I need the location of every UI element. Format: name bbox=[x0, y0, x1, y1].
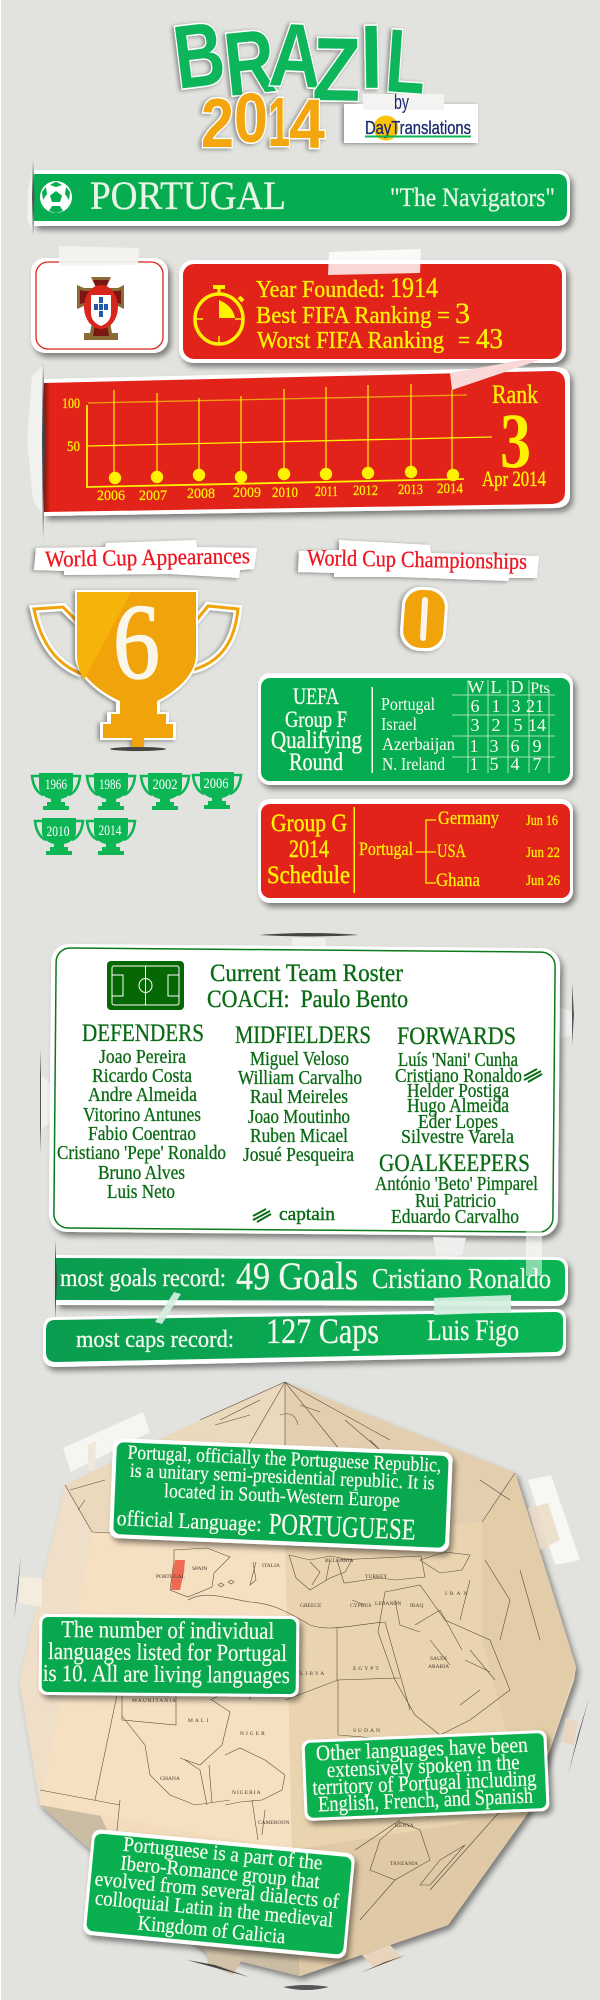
chart axis labels: 2012 bbox=[353, 483, 378, 499]
trophy 2006: 2006 bbox=[204, 776, 229, 792]
trophy 1986 bbox=[87, 773, 135, 810]
map labels: SPAIN bbox=[192, 1566, 207, 1572]
standings: 6 bbox=[510, 736, 520, 756]
icon: stopwatch bbox=[195, 287, 243, 344]
schedule heading: 2014 bbox=[289, 836, 329, 863]
logo card: Day Translations: DayTranslations bbox=[365, 118, 471, 138]
map labels: SUDAN bbox=[353, 1728, 382, 1734]
callout: official language: Portugal, officially the Portuguese Republic, bbox=[127, 1442, 442, 1477]
chart axis labels: 2013 bbox=[398, 482, 423, 498]
chart axis labels: 2009 bbox=[233, 485, 261, 501]
map labels: GREECE bbox=[300, 1603, 322, 1609]
map labels: MALI bbox=[188, 1718, 210, 1724]
midfielders bbox=[235, 1022, 371, 1166]
panel: FIFA stats: 1914 bbox=[390, 272, 438, 304]
fixtures: Jun 26 bbox=[526, 873, 560, 889]
goalkeepers bbox=[375, 1150, 538, 1228]
title: Brazil: B bbox=[168, 4, 230, 109]
defenders bbox=[57, 1020, 226, 1203]
standings bbox=[381, 677, 555, 774]
standings: N. Ireland bbox=[382, 754, 445, 774]
callout: official language: official Language: bbox=[116, 1505, 262, 1536]
fixtures: Germany bbox=[438, 808, 499, 829]
qualifying heading: Qualifying bbox=[271, 727, 362, 754]
map labels: MAURITANIA bbox=[132, 1698, 177, 1704]
title: Brazil: I bbox=[360, 8, 383, 108]
qualifying heading: Group F bbox=[285, 707, 347, 732]
standings: Pts bbox=[530, 680, 550, 697]
chart axis labels: 2010 bbox=[272, 485, 298, 501]
defenders: DEFENDERS bbox=[82, 1020, 204, 1047]
header banner: Portugal bbox=[27, 160, 570, 236]
callout: other languages bbox=[301, 1730, 550, 1821]
roster heading: COACH: Paulo Bento bbox=[207, 986, 408, 1013]
icon: football bbox=[40, 181, 72, 213]
forwards bbox=[395, 1023, 542, 1148]
map labels: CAMEROON bbox=[258, 1820, 290, 1826]
schedule heading: Group G bbox=[271, 810, 347, 837]
map labels: ARABIA bbox=[428, 1664, 449, 1670]
chart axis labels: 50 bbox=[67, 439, 80, 455]
callout: official language bbox=[109, 1438, 453, 1552]
globe: paper map polyhedron bbox=[19, 1382, 576, 1976]
forwards: Cristiano Ronaldo bbox=[395, 1065, 522, 1087]
standings: 3 bbox=[512, 696, 520, 716]
heading: World Cup Championships: World Cup Championships bbox=[307, 545, 527, 574]
map labels: NIGERIA bbox=[232, 1790, 262, 1796]
forwards: Hugo Almeida bbox=[407, 1095, 509, 1117]
line chart bbox=[87, 384, 492, 487]
map labels: IRAQ bbox=[410, 1603, 423, 1609]
map labels: ITALIA bbox=[262, 1563, 280, 1569]
map labels bbox=[132, 1558, 470, 1867]
standings: 9 bbox=[532, 736, 542, 756]
trophy 2010: 2010 bbox=[46, 824, 70, 840]
forwards: FORWARDS bbox=[397, 1023, 516, 1050]
callout: individual languages: languages listed for Portugal bbox=[48, 1639, 287, 1667]
captain legend: captain bbox=[279, 1204, 336, 1225]
title: Brazil: A bbox=[267, 5, 324, 108]
icon: gold trophy with 6 appearances: 6 bbox=[113, 583, 160, 702]
schedule heading: Schedule bbox=[267, 862, 350, 889]
defenders: Joao Pereira bbox=[99, 1046, 186, 1068]
title: Brazil: Z bbox=[312, 20, 361, 121]
trophy 1966 bbox=[32, 773, 80, 810]
qualifying heading bbox=[271, 684, 362, 776]
forwards: Eder Lopes bbox=[418, 1111, 498, 1133]
current rank: Rank bbox=[492, 380, 538, 409]
callout: Ibero-Romance origin: Portuguese is a part of the bbox=[122, 1832, 324, 1875]
current rank: 3 bbox=[500, 397, 531, 484]
standings: 1 bbox=[470, 754, 478, 774]
panel: FIFA stats: 43 bbox=[476, 324, 503, 355]
map labels: CYPRUS bbox=[350, 1603, 371, 1609]
callout: other languages: Other languages have been bbox=[315, 1732, 528, 1766]
trophy 2006 bbox=[193, 772, 241, 809]
small trophies: appearance years bbox=[32, 772, 241, 855]
standings: L bbox=[490, 677, 502, 697]
title: 2014: 0 bbox=[234, 79, 268, 157]
globe mounting tapes bbox=[14, 1412, 589, 1990]
map labels: LIBYA bbox=[300, 1671, 326, 1677]
standings: 5 bbox=[490, 754, 498, 774]
decorative tape join bbox=[433, 1237, 466, 1262]
title: 2014: 4 bbox=[289, 85, 325, 163]
current rank: Apr 2014 bbox=[482, 466, 546, 491]
goalkeepers: Rui Patricio bbox=[415, 1190, 496, 1212]
icon: gold trophy with 6 appearances bbox=[34, 583, 238, 751]
map labels: EGYPT bbox=[353, 1666, 381, 1672]
goalkeepers: António 'Beto' Pimparel bbox=[375, 1173, 538, 1195]
title: 2014: 2 bbox=[201, 84, 234, 162]
trophy 2014 bbox=[87, 818, 135, 855]
callout: individual languages: is 10. All are living languages bbox=[43, 1661, 290, 1689]
record bar: most goals: 49 Goals bbox=[236, 1255, 358, 1298]
record bar: most caps: most caps record: bbox=[76, 1327, 234, 1353]
fixtures: Jun 16 bbox=[526, 813, 558, 829]
title: 2014: 1 bbox=[268, 83, 290, 161]
chart axis labels: 2006 bbox=[97, 488, 125, 504]
defenders: Ricardo Costa bbox=[92, 1065, 192, 1087]
defenders: Fabio Coentrao bbox=[88, 1123, 196, 1145]
fixtures: Portugal bbox=[359, 839, 413, 860]
map: Portugal highlighted bbox=[171, 1560, 185, 1590]
callout: Ibero-Romance origin: Ibero-Romance group that bbox=[119, 1851, 321, 1893]
standings: 3 bbox=[490, 736, 498, 756]
standings: Israel bbox=[381, 714, 417, 734]
midfielders: Joao Moutinho bbox=[248, 1106, 350, 1128]
map labels: PORTUGAL bbox=[156, 1574, 186, 1580]
map labels: LEBANON bbox=[375, 1601, 401, 1607]
panel: FIFA rank chart bbox=[27, 360, 570, 540]
midfielders: Ruben Micael bbox=[250, 1125, 348, 1147]
panel: FIFA stats: 3 bbox=[455, 297, 470, 330]
callout: official language: PORTUGUESE bbox=[268, 1508, 416, 1547]
captain legend bbox=[253, 1204, 336, 1225]
panel: FIFA stats: Year Founded: bbox=[256, 277, 385, 303]
panel: FIFA stats: Worst FIFA Ranking bbox=[257, 328, 444, 354]
map labels: KENYA bbox=[395, 1823, 414, 1829]
callout: official language: is a unitary semi-presidential republic. It is bbox=[129, 1460, 435, 1494]
goalkeepers: GOALKEEPERS bbox=[379, 1150, 530, 1177]
trophy 1966: 1966 bbox=[45, 777, 67, 793]
callout: official language: located in South-Western Europe bbox=[164, 1480, 400, 1512]
defenders: Andre Almeida bbox=[88, 1084, 197, 1106]
forwards: Silvestre Varela bbox=[401, 1126, 514, 1148]
panel: FIFA stats: Best FIFA Ranking = bbox=[256, 303, 450, 329]
standings: Portugal bbox=[381, 694, 435, 714]
header banner: Portugal: "The Navigators" bbox=[390, 183, 555, 212]
heading: World Cup Championships bbox=[298, 540, 539, 581]
midfielders: William Carvalho bbox=[238, 1067, 362, 1089]
forwards: Helder Postiga bbox=[407, 1080, 509, 1102]
standings: 5 bbox=[514, 715, 522, 735]
standings: Azerbaijan bbox=[382, 734, 455, 754]
logo card: Day Translations: by bbox=[394, 92, 409, 114]
map labels: BULGARIA bbox=[325, 1558, 353, 1564]
standings: 6 bbox=[470, 696, 480, 716]
record bar: most caps: Luis Figo bbox=[427, 1314, 519, 1347]
record bar: most caps: 127 Caps bbox=[266, 1311, 379, 1351]
callout: other languages: territory of Portugal including bbox=[312, 1765, 537, 1800]
standings: 2 bbox=[492, 715, 500, 735]
title: Brazil: L bbox=[383, 11, 429, 114]
header banner: Portugal: PORTUGAL bbox=[90, 173, 286, 218]
icon: football pitch bbox=[107, 961, 184, 1010]
chart axis labels: 2007 bbox=[139, 488, 167, 504]
map labels: GHANA bbox=[160, 1776, 180, 1782]
chart axis labels: 2014 bbox=[437, 481, 463, 497]
map labels: SAUDI bbox=[430, 1656, 447, 1662]
trophy 1986: 1986 bbox=[99, 777, 121, 793]
title: 2014 bbox=[201, 79, 325, 163]
current rank bbox=[482, 380, 546, 491]
defenders: Bruno Alves bbox=[98, 1162, 185, 1184]
goalkeepers: Eduardo Carvalho bbox=[391, 1206, 519, 1228]
trophy 2014: 2014 bbox=[98, 823, 122, 839]
map labels: IRAN bbox=[445, 1591, 470, 1597]
trophy 2002 bbox=[141, 773, 189, 810]
roster heading: Current Team Roster bbox=[210, 960, 404, 987]
midfielders: Raul Meireles bbox=[250, 1086, 348, 1108]
fixtures: USA bbox=[437, 841, 466, 862]
fixtures bbox=[359, 808, 560, 891]
callout: other languages: English, French, and Spanish bbox=[318, 1783, 533, 1816]
standings: 4 bbox=[510, 754, 520, 774]
panel: team roster bbox=[40, 933, 574, 1236]
defenders: Vitorino Antunes bbox=[83, 1104, 201, 1126]
callout: other languages: extensively spoken in the bbox=[326, 1749, 520, 1782]
defenders: Cristiano 'Pepe' Ronaldo bbox=[57, 1142, 226, 1164]
defenders: Luis Neto bbox=[107, 1181, 175, 1203]
midfielders: Josué Pesqueira bbox=[243, 1144, 354, 1166]
record bar: most goals: Cristiano Ronaldo bbox=[372, 1263, 551, 1295]
chart axis labels: 2011 bbox=[315, 484, 338, 500]
standings: D bbox=[510, 677, 524, 697]
callout: individual languages bbox=[39, 1614, 299, 1697]
standings: W bbox=[468, 677, 484, 697]
standings: 21 bbox=[526, 696, 544, 716]
chart axis labels: 2008 bbox=[187, 486, 215, 502]
roster heading bbox=[207, 960, 408, 1013]
callout: Ibero-Romance origin bbox=[83, 1829, 355, 1959]
standings: 3 bbox=[470, 715, 480, 735]
tape strips on records bbox=[155, 1210, 542, 1324]
icon: Portuguese federation crest bbox=[77, 277, 124, 340]
record bar: most caps bbox=[43, 1309, 566, 1367]
chart axis labels: 100 bbox=[62, 396, 80, 412]
schedule heading bbox=[267, 810, 350, 889]
midfielders: Miguel Veloso bbox=[250, 1048, 349, 1070]
standings: 14 bbox=[528, 715, 546, 735]
panel: UEFA qualifying table bbox=[258, 673, 573, 785]
heading: World Cup Appearances: World Cup Appearances bbox=[45, 543, 250, 572]
panel: Group G schedule bbox=[258, 799, 573, 903]
record bar: most goals bbox=[55, 1240, 568, 1320]
map labels: TURKEY bbox=[365, 1574, 387, 1580]
title: Brazil: R bbox=[220, 11, 280, 116]
callout: individual languages: The number of individual bbox=[61, 1617, 275, 1645]
callout: Ibero-Romance origin: colloquial Latin in the medieval bbox=[94, 1885, 334, 1932]
forwards: Luís 'Nani' Cunha bbox=[398, 1049, 518, 1071]
title: Brazil bbox=[168, 4, 429, 121]
map labels: NIGER bbox=[240, 1731, 267, 1737]
trophy 2002: 2002 bbox=[152, 777, 178, 793]
midfielders: MIDFIELDERS bbox=[235, 1022, 371, 1049]
heading: World Cup Appearances bbox=[34, 540, 257, 578]
qualifying heading: Round bbox=[289, 749, 343, 776]
trophy 2010 bbox=[35, 818, 83, 855]
standings: 1 bbox=[492, 696, 500, 716]
qualifying heading: UEFA bbox=[293, 684, 339, 709]
map borders bbox=[40, 1382, 540, 1920]
record bar: most goals: most goals record: bbox=[60, 1265, 226, 1292]
callout: Ibero-Romance origin: Kingdom of Galicia bbox=[137, 1911, 287, 1948]
icon: zero championships bbox=[399, 585, 449, 653]
standings: 7 bbox=[532, 754, 542, 774]
fixtures: Ghana bbox=[436, 870, 480, 891]
map labels: TANZANIA bbox=[390, 1861, 418, 1867]
standings: 1 bbox=[470, 736, 478, 756]
logo card: Day Translations bbox=[344, 92, 478, 143]
panel: crest bbox=[31, 246, 168, 353]
callout: Ibero-Romance origin: evolved from several dialects of bbox=[94, 1866, 340, 1913]
fixtures: Jun 22 bbox=[526, 845, 560, 861]
panel: FIFA stats: = bbox=[458, 328, 470, 354]
chart axis labels bbox=[62, 396, 463, 504]
panel: FIFA stats bbox=[179, 249, 566, 363]
